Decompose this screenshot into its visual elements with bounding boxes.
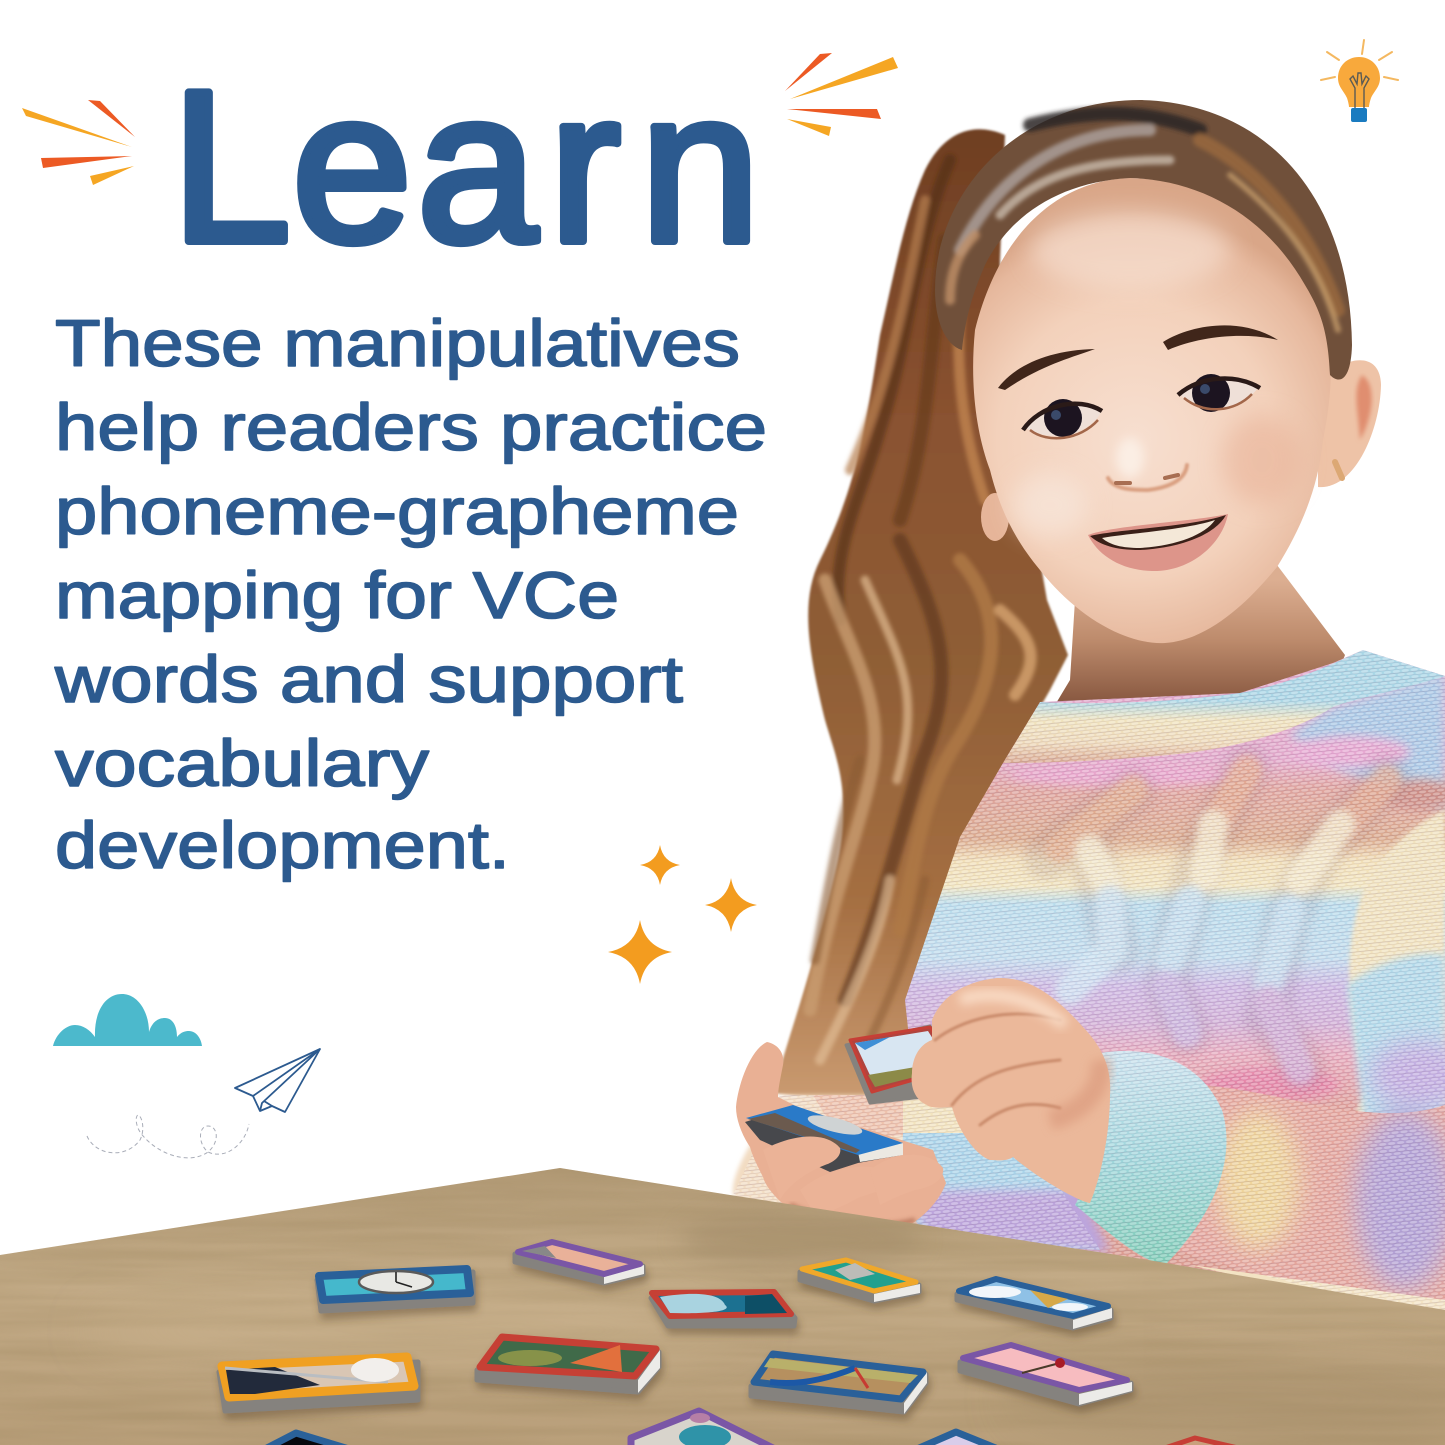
right hand: [912, 978, 1110, 1203]
eyebrows: [998, 349, 1095, 390]
sweater body: [900, 650, 1445, 1320]
body text: [54, 306, 767, 882]
title: Learn: [171, 45, 760, 287]
sleeve right: [1349, 810, 1445, 1130]
eyes: [1023, 374, 1260, 438]
body text: words and support: [54, 642, 683, 716]
card: playground: [751, 1354, 927, 1414]
shoulder and upper sleeve: [1290, 672, 1445, 810]
body text: mapping for VCe: [55, 558, 619, 632]
card: clock: [317, 1269, 473, 1311]
icon: left burst: [22, 100, 135, 185]
card: stone: [800, 1260, 920, 1302]
card: lilac: [917, 1432, 998, 1445]
card: ear: [515, 1242, 644, 1284]
icon: right burst: [785, 53, 898, 136]
body text: help readers practice: [55, 390, 767, 464]
face: [973, 178, 1331, 643]
body text: development.: [55, 808, 510, 882]
left hand: [736, 1042, 946, 1234]
left ear: [981, 493, 1009, 541]
neck: [1040, 565, 1345, 730]
body text: These manipulatives: [55, 306, 740, 380]
card: wave: [651, 1292, 795, 1326]
card: globe: [631, 1411, 775, 1445]
icon: light bulb: [1321, 40, 1398, 122]
top hair: [935, 100, 1352, 380]
card held: stacked: [745, 1105, 903, 1172]
card: rose: [960, 1345, 1132, 1405]
icon: cloud: [53, 994, 202, 1046]
card held: sky: [846, 1026, 965, 1103]
girl photo: [733, 100, 1445, 1320]
hair: ponytail: [773, 129, 1068, 1097]
card: rake: [477, 1337, 660, 1393]
collar: [1003, 650, 1445, 763]
dashed flight path: [87, 1115, 249, 1158]
mouth: [1088, 514, 1228, 571]
card: red edge: [1165, 1438, 1238, 1445]
knit texture: [900, 650, 1445, 1320]
body text: phoneme-grapheme: [55, 474, 739, 548]
cables: [1047, 767, 1387, 1070]
icon: sparkles: [608, 845, 757, 984]
table: [0, 1165, 1445, 1445]
icon: paper plane: [235, 1049, 320, 1112]
left hand fingers: [763, 1136, 943, 1215]
card: flute: [219, 1357, 418, 1411]
nose: [1108, 438, 1187, 490]
right ear: [1318, 360, 1381, 487]
card: kite: [957, 1279, 1112, 1329]
body text: vocabulary: [55, 726, 429, 800]
card: black: [265, 1433, 349, 1445]
left sleeve: [733, 1095, 1110, 1252]
right forearm and cuff: [1075, 1051, 1445, 1315]
